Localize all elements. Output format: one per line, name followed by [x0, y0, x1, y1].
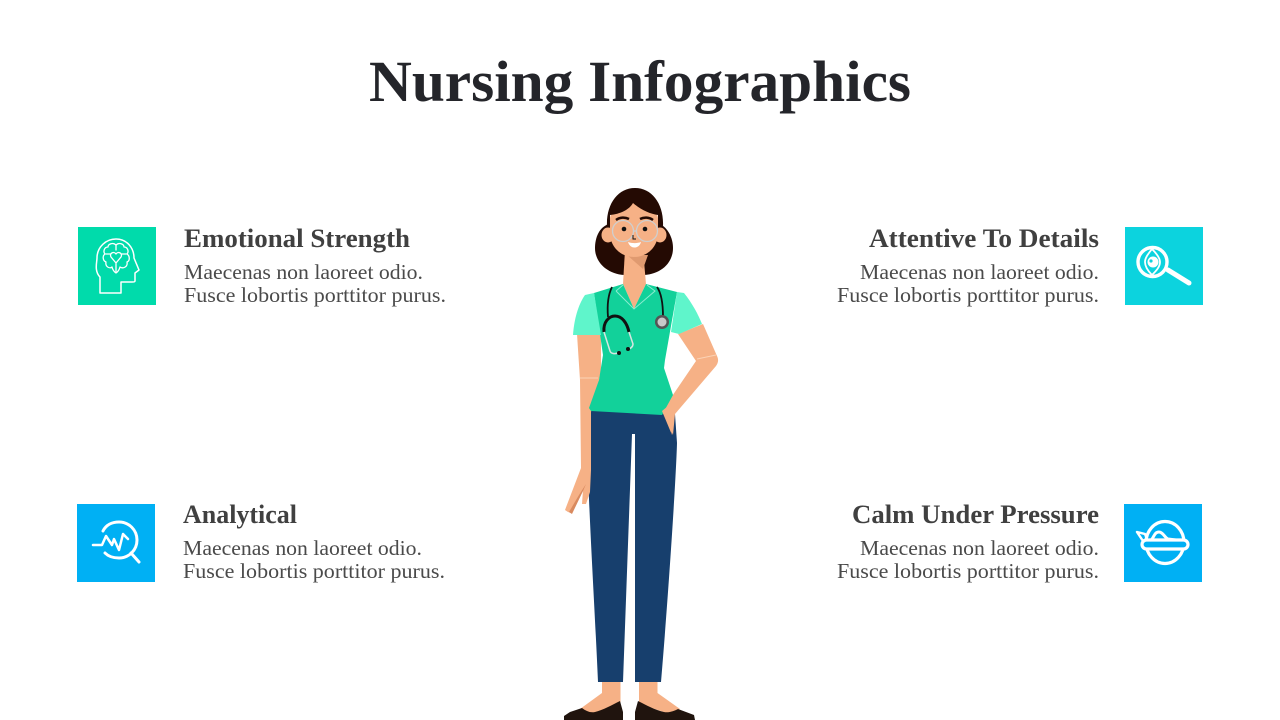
shirt	[589, 284, 677, 415]
text block: Maecenas non laoreet odio.	[860, 260, 1099, 284]
right sleeve	[671, 292, 702, 334]
eyebrows	[616, 218, 653, 220]
right arm	[662, 324, 718, 435]
panel: analytical	[77, 500, 445, 583]
text block	[183, 536, 445, 583]
nose	[633, 235, 636, 239]
text block: Maecenas non laoreet odio.	[183, 536, 422, 560]
ankles and feet	[580, 682, 620, 714]
text block	[837, 536, 1099, 583]
smile	[628, 242, 641, 248]
text block: Fusce lobortis porttitor purus.	[837, 283, 1099, 307]
neck shadow	[627, 255, 648, 269]
stethoscope	[604, 287, 669, 355]
panel: attentive to details	[837, 224, 1203, 307]
heading: Attentive To Details	[869, 224, 1099, 253]
eyes	[622, 227, 647, 231]
text block	[184, 260, 446, 307]
right hand detail in pocket	[662, 406, 672, 435]
collar	[616, 285, 655, 309]
text block: Fusce lobortis porttitor purus.	[183, 559, 445, 583]
text block: Fusce lobortis porttitor purus.	[184, 283, 446, 307]
back hair	[595, 224, 673, 275]
title: Nursing Infographics	[369, 49, 911, 114]
text block: Maecenas non laoreet odio.	[860, 536, 1099, 560]
glasses	[612, 220, 658, 242]
left arm	[565, 334, 601, 513]
text block: Maecenas non laoreet odio.	[184, 260, 423, 284]
heading: Emotional Strength	[184, 224, 411, 253]
top hair	[607, 188, 663, 226]
ears	[602, 228, 666, 242]
panel: emotional strength	[78, 224, 446, 307]
face	[610, 200, 658, 257]
panel: calm under pressure	[837, 500, 1202, 583]
pants	[588, 410, 677, 682]
illustration: nurse	[564, 188, 718, 720]
heading: Analytical	[183, 500, 297, 529]
icon: head with blindfold band	[1124, 504, 1202, 582]
icon: head with brain and heart	[78, 227, 156, 305]
neck	[623, 250, 646, 309]
icon: magnifier with pulse	[77, 504, 155, 582]
shoes	[564, 701, 623, 720]
heading: Calm Under Pressure	[852, 500, 1099, 529]
icon: magnifier with eye	[1125, 227, 1203, 305]
text block: Fusce lobortis porttitor purus.	[837, 559, 1099, 583]
left sleeve	[573, 293, 601, 335]
text block	[837, 260, 1099, 307]
